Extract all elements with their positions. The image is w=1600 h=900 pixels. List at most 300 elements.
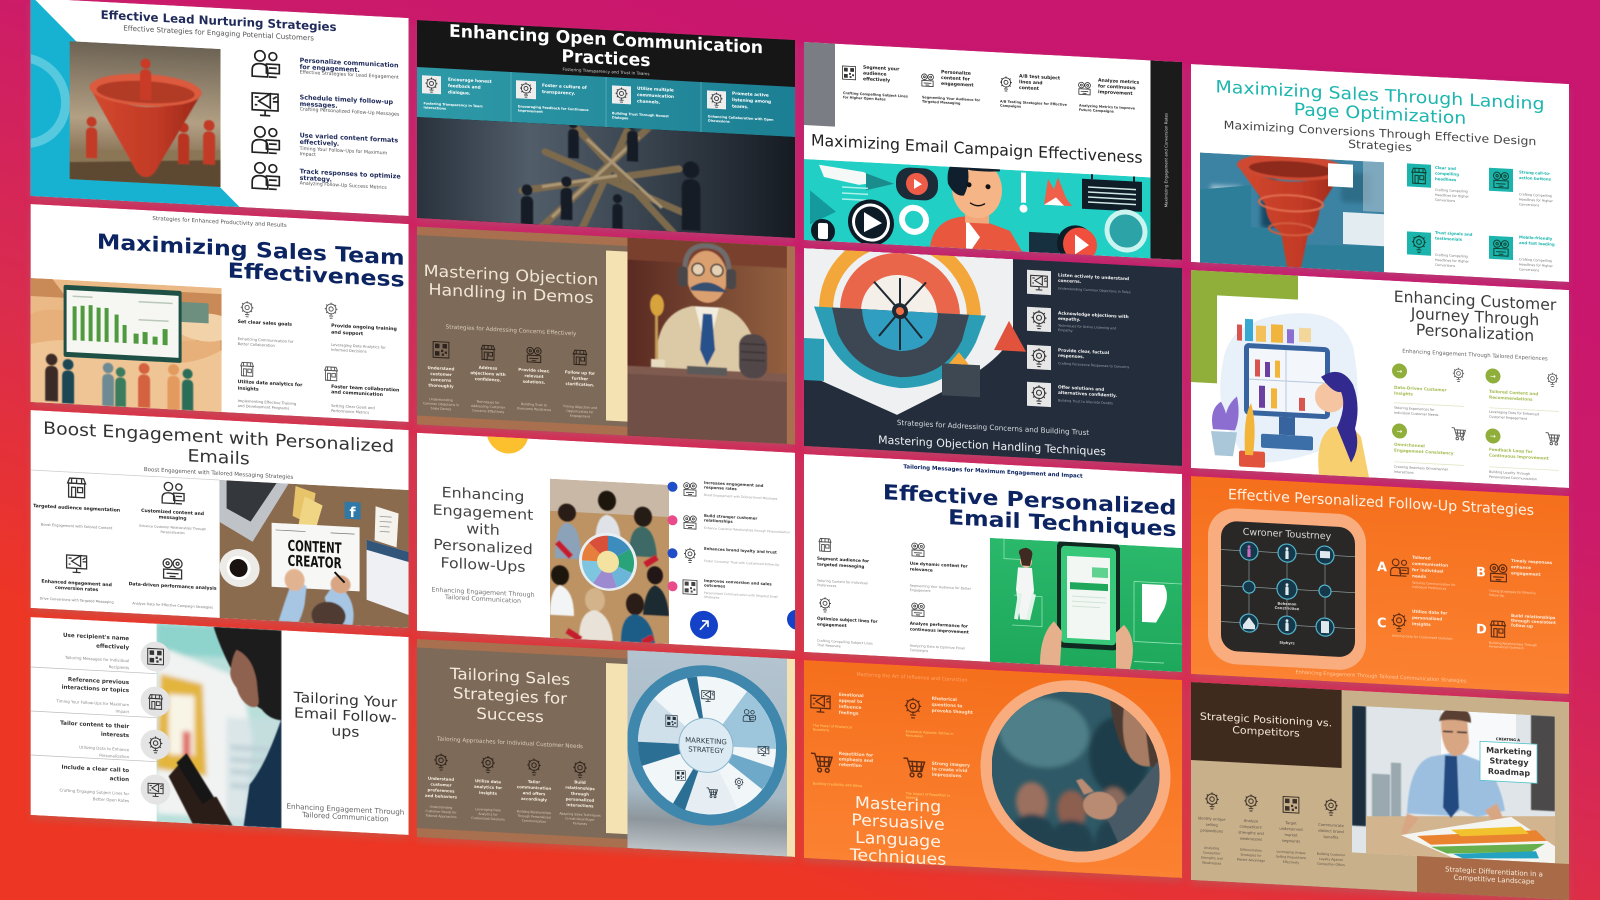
item: emotional appeal: The Power of Rhetorical [812, 723, 852, 730]
item: customized content: Enhance Customer Relationships Through [139, 524, 206, 531]
item: analyze metrics: for continuous [1098, 83, 1136, 91]
title: Emails [187, 446, 250, 469]
item D: Building Relationships Through [1489, 641, 1537, 647]
item: strong imagery: impressions [932, 772, 962, 779]
item: clear sales goals: Set clear sales goals [238, 319, 292, 328]
item: trust signals: testimonials [1435, 236, 1463, 242]
slide: Tailoring Your Email Follow-ups [31, 617, 409, 835]
subtitle: Effective Strategies for Engaging Potential Customers [123, 23, 314, 43]
column: unique propositions [1198, 792, 1226, 866]
item: A/B test subject lines: lines and [1019, 79, 1043, 86]
column: analyze competitors [1237, 794, 1265, 863]
teal strategy band: Enhancing Collaboration with Open [708, 114, 774, 122]
steps row: accordingly [521, 796, 547, 802]
list item: recipient's name: Use recipient's name [63, 633, 129, 642]
item: omnichannel: Omnichannel [1394, 442, 1425, 448]
photo: executive with strategy roadmap: CREATING A [1496, 737, 1520, 742]
item: clear sales goals: Better Collaboration [238, 342, 275, 348]
right strip [787, 246, 795, 444]
grey corner block [804, 42, 835, 127]
title: Maximizing Sales Through Landing [1215, 77, 1545, 114]
item: customized content [139, 481, 206, 536]
bullet list: Build stronger customer [704, 513, 757, 521]
item: performance analysis: Data-driven performance analysis [129, 581, 217, 592]
item: mobile friendly: Conversions [1519, 267, 1539, 272]
bullet list: response rates [704, 484, 737, 491]
item: segment audience: audience [863, 70, 886, 78]
title: with [466, 520, 500, 539]
steps row: Techniques for [475, 400, 500, 405]
bullet list: outcomes [704, 582, 726, 589]
title: Strategies for [453, 684, 567, 708]
item: emotional appeal: appeal to [839, 698, 862, 705]
steps row: relationships [565, 785, 595, 791]
teal strategy band [417, 67, 795, 137]
item: customized content: Customized content and [141, 508, 204, 517]
list item: previous interactions [55, 676, 171, 717]
subtitle: Strategies for Addressing Concerns Effectively [446, 325, 577, 337]
item: analyze performance: Analyzing Data to Optimize Email [910, 644, 965, 651]
list item: previous interactions: Timing Your Follow-Ups for Maximum [55, 698, 129, 707]
item: feedback loop: Personalized Communication [1489, 475, 1537, 481]
item: track responses: Analyzing Follow-Up Success Metrics [300, 180, 387, 191]
steps row: Leveraging Data [475, 807, 501, 812]
subtitle: Mastering the Art of Influence and Conviction [856, 672, 968, 684]
title: Effective Lead Nurturing Strategies [101, 8, 337, 34]
item: performance analysis [129, 557, 217, 610]
steps row: Understanding [429, 397, 453, 402]
steps row: Timing Objection and [562, 404, 597, 410]
green L-shaped block [1191, 270, 1298, 388]
steps row: Address [479, 365, 498, 371]
item: enhanced engagement: Enhanced engagement and [41, 579, 112, 588]
steps row: through [571, 791, 589, 797]
column: distinct benefits [1317, 798, 1346, 867]
subtitle: Boost Engagement with Tailored Messaging Strategies [144, 467, 293, 481]
item: analyze metrics [1079, 77, 1140, 115]
item: omnichannel: Creating Seamless Omnichannel [1394, 465, 1448, 472]
item: ongoing training: Leveraging Data Analytics for [331, 343, 386, 350]
item: track responses: Track responses to optimize [300, 167, 401, 181]
item: personalize content: Personalize [941, 69, 971, 77]
item: repetition: retention [839, 762, 862, 769]
steps row: Personas [573, 821, 587, 826]
item: team collaboration: Performance Metrics [331, 409, 369, 415]
column: distinct benefits: Building Customer [1317, 852, 1346, 857]
steps row: communication [517, 784, 551, 791]
item C [1377, 607, 1453, 641]
item: personalize content: content for [941, 75, 971, 83]
orange strips [417, 639, 795, 857]
title: Engagement [433, 501, 533, 524]
item: clear headlines: compelling [1435, 171, 1459, 177]
item: emotional appeal: Emotional [839, 692, 864, 699]
teal strategy band: listening among [732, 97, 771, 105]
photo: content creator desk: CONTENT [288, 537, 342, 557]
item: data-driven insights: → [1397, 367, 1403, 376]
item: personalize content [922, 68, 981, 107]
item A: A [1377, 560, 1387, 575]
second arrow button [787, 609, 807, 630]
steps row: Tailor [528, 779, 540, 785]
item C: Utilize data for [1412, 609, 1448, 616]
arrow button [690, 610, 718, 640]
column: analyze competitors: Analyze [1244, 819, 1259, 824]
cyan corner shape [31, 0, 240, 207]
item D: D [1476, 622, 1487, 638]
item D: through consistent [1511, 618, 1556, 625]
title: Tailoring Sales [449, 664, 570, 689]
teal strategy band: dialogue. [448, 89, 471, 97]
item: feedback loop: Feedback Loop for [1489, 447, 1533, 454]
item: strong imagery: to create vivid [932, 766, 967, 774]
subtitle: Strategies for Enhanced Productivity and Results [152, 216, 287, 229]
teal strategy band: Interactions [424, 106, 446, 111]
icon: monitor and megaphone [252, 93, 278, 116]
column: target segments: Effectively [1283, 860, 1299, 865]
bullet list: Enhances brand loyalty and trust [704, 546, 777, 555]
item: segment audience: Tailoring Content for Individual [816, 579, 868, 585]
title: Enhancing Open Communication [449, 22, 763, 58]
item: personalize communication: Effective Strategies for Lead Engagement [300, 69, 399, 81]
item: varied content formats: effectively. [300, 138, 339, 148]
item: team collaboration [325, 367, 399, 417]
title: ups [331, 722, 360, 741]
title: Language [855, 827, 941, 851]
steps row: further [572, 375, 588, 381]
item: tailored content: Leveraging Data for Enhanced [1489, 410, 1539, 416]
item: varied content formats: Timing Your Follow-Ups for Maximum [299, 146, 388, 156]
list item: recipient's name: Recipients [109, 664, 129, 670]
teal strategy band: feedback and [448, 83, 481, 91]
item: clear headlines: headlines [1435, 176, 1457, 182]
list item: call to action [60, 765, 171, 805]
item: ongoing training: Provide ongoing training [331, 323, 397, 332]
subtitle: Tailored Communication [301, 810, 389, 824]
subtitle: Fostering Transparency and Trust in Teams [562, 67, 650, 76]
steps row: to Individual Buyer [565, 816, 595, 822]
photo: content creator desk: f [350, 505, 357, 521]
list item: listen actively: concerns. [1058, 278, 1082, 285]
item: analyze performance [910, 603, 969, 655]
subtitle: Enhancing Engagement Through [286, 802, 404, 817]
illustration: gauge dial [804, 248, 1026, 415]
item: tailored content: Customer Engagement [1489, 415, 1528, 421]
item: varied content formats: Impact [300, 151, 316, 158]
slide: Enhancing Customer Journey Through Personalization [1191, 270, 1569, 488]
list item: tailor content: Personalization [99, 753, 130, 759]
title: Effectiveness [228, 259, 405, 292]
title: Boost Engagement with Personalized [43, 419, 394, 457]
item: emotional appeal: feelings [839, 710, 859, 717]
list item: recipient's name: effectively [96, 643, 129, 651]
item: rhetorical questions: Emotional Appeals: Pathos in [906, 729, 954, 736]
steps row: Follow up for [565, 369, 595, 376]
item: data-driven insights: Data-Driven Customer [1394, 385, 1447, 393]
item A: communication [1412, 561, 1448, 568]
item: optimize subject lines: Optimize subject lines for [817, 616, 879, 624]
illustration: shopper at online store [1211, 313, 1369, 478]
title: Mastering [855, 792, 941, 816]
item C: Utilizing Data for Customized Outreach [1392, 634, 1453, 641]
teal strategy band: channels. [637, 98, 661, 106]
steps row: concerns [431, 377, 452, 383]
steps row: customer [430, 782, 452, 788]
item: analyze performance: Analyze performance for [910, 621, 969, 629]
item: mobile friendly: and fast loading [1519, 240, 1555, 247]
item: data-driven insights: Individual Customer Needs [1394, 411, 1439, 417]
item D: Personalized Outreach [1489, 644, 1524, 650]
list item: previous interactions: Impact [115, 708, 130, 714]
item: data analytics: Utilize data analytics for [238, 379, 303, 388]
title: Mastering Objection Handling Techniques [878, 433, 1106, 458]
item: feedback loop: → [1490, 432, 1496, 441]
customer journey board: Bohemon [1278, 602, 1297, 607]
slide: Effective Personalized Email Techniques [804, 454, 1182, 672]
steps row: Customized Solutions [471, 816, 505, 822]
list item: acknowledge objections: Empathy [1058, 328, 1073, 333]
customer journey board [1221, 521, 1355, 658]
item: analyze performance: Campaigns [910, 648, 928, 653]
illustration: team viewing dashboard [30, 278, 222, 412]
title: Personalization [1416, 321, 1534, 345]
subtitle: Enhancing Engagement Through Tailored Communication Strategies [1296, 670, 1467, 685]
bullet list: Foster Consumer Trust with Customized Follow-Up [704, 559, 779, 567]
item: analyze metrics: improvement [1098, 89, 1133, 97]
item: strong call-to-action: Strong call-to- [1519, 169, 1551, 176]
photo: red funnel on table [70, 41, 221, 187]
item: tailored content: Tailored Content and [1489, 389, 1538, 396]
item: segment audience: targeted messaging [817, 561, 864, 569]
light ring decoration [30, 54, 70, 148]
item: data analytics [238, 362, 303, 411]
list item: previous interactions: Reference previous [68, 677, 130, 686]
list item: call to action: Better Open Rates [93, 796, 129, 803]
steps row: Understand [428, 365, 455, 371]
customer journey board: Constriction [1275, 606, 1300, 611]
item: dynamic content [910, 543, 972, 595]
item: segment audience: Segment audience for [817, 556, 870, 563]
cream strip [606, 663, 628, 834]
column: unique propositions: Competitor [1203, 851, 1221, 856]
column: target segments: Target [1284, 821, 1297, 826]
item A: needs [1412, 573, 1427, 579]
item: audience segmentation [33, 476, 120, 531]
dark title block [1191, 682, 1342, 768]
slide: Strategic Positioning vs. Competitors [1191, 682, 1569, 900]
title: Success [476, 704, 544, 726]
orange strips [417, 226, 795, 444]
column: analyze competitors: Strategies for [1240, 853, 1262, 858]
item: emotional appeal: influence [839, 704, 862, 711]
column: distinct benefits: Communicate [1318, 823, 1345, 828]
subtitle: Maximizing Conversions Through Effective Design [1224, 118, 1536, 148]
title: Personalized [433, 536, 533, 558]
column: analyze competitors: Market Advantage [1237, 857, 1265, 863]
column: unique propositions: Identify unique [1198, 816, 1226, 822]
slide: Mastering Persuasive Language Techniques [804, 660, 1182, 881]
item: data analytics: Implementing Effective Training [238, 399, 296, 406]
item: audience segmentation: Boost Engagement with Tailored Content [41, 523, 113, 530]
item: tailored content: Recommendations [1489, 395, 1533, 402]
column: distinct benefits: Loyalty Against [1319, 857, 1344, 862]
item D: follow-up [1511, 623, 1533, 629]
teal strategy band: Encourage honest [448, 77, 492, 85]
item: feedback loop: Building Loyalty Through [1489, 470, 1530, 476]
item: customized content: messaging [159, 514, 187, 522]
steps row: thoroughly [428, 383, 454, 389]
list item: call to action: action [110, 776, 129, 783]
column: analyze competitors: Differentiation [1240, 848, 1262, 853]
steps row: personalized [566, 796, 595, 803]
steps row: and behaviors [425, 793, 458, 800]
title: Handling in Demos [428, 280, 594, 307]
column: unique propositions: Analyzing [1204, 846, 1219, 850]
item: dynamic content: Segmenting Your Audience for Better [910, 584, 972, 591]
item D: Build relationships [1511, 613, 1556, 620]
item: trust signals: Trust signals and [1435, 230, 1473, 237]
icon: person with headset [252, 50, 279, 78]
title: Email Techniques [948, 506, 1176, 542]
bullet list: Improves conversion and sales [704, 578, 772, 587]
bullet list: relationships [704, 517, 733, 524]
list item: recipient's name: Tailoring Messages for Individual [64, 655, 129, 663]
title: Strategic Positioning vs. [1200, 711, 1332, 729]
item: enhanced engagement [40, 553, 114, 604]
photo: executive with strategy roadmap: Roadmap [1488, 767, 1530, 778]
list item: call to action: Include a clear call to [61, 765, 129, 774]
item: rhetorical questions: provoke thought [932, 708, 973, 716]
illustration: marketing strategy wheel: MARKETING [685, 736, 727, 746]
item: segment audience: effectively [863, 76, 890, 84]
list item: factual responses: Provide clear, factual [1058, 347, 1110, 356]
column: distinct benefits: Competitor Offers [1317, 862, 1345, 867]
photo: man pointing in circular frame [980, 675, 1170, 867]
item: optimize subject lines: Crafting Compelling Subject Lines [817, 639, 873, 646]
item: trust signals [1407, 231, 1472, 267]
teal strategy band: Building Trust Through Honest [612, 111, 669, 118]
item: clear headlines: Headlines for Higher [1435, 193, 1469, 199]
slide: Mastering Objection Handling Techniques [804, 234, 1182, 466]
steps row: Understanding [430, 805, 452, 810]
steps row: and offers [523, 790, 546, 796]
item: clear headlines [1407, 163, 1469, 204]
steps row: Common Objections in [423, 401, 459, 407]
item C: personalized [1412, 615, 1442, 621]
item: A/B test subject lines: Campaigns [1000, 104, 1021, 109]
teal strategy band: Foster a culture of [542, 83, 587, 91]
steps row: Adapting Sales Techniques [559, 812, 601, 818]
item: A/B test subject lines [1000, 74, 1067, 108]
title: Tailoring Your [293, 689, 398, 711]
item: track responses: strategy. [300, 174, 332, 184]
item: segment audience: Crafting Compelling Subject Lines [843, 91, 908, 98]
item: optimize subject lines [816, 597, 879, 650]
caption block [1417, 856, 1569, 900]
item: enhanced engagement: conversion rates [55, 585, 98, 593]
item: strong imagery [903, 758, 970, 803]
teal strategy band: Discussions [708, 119, 730, 124]
item: omnichannel: Interactions [1394, 470, 1414, 475]
column: target segments: market [1284, 833, 1298, 838]
subtitle: Tailoring Messages for Maximum Engagement and Impact [903, 464, 1083, 480]
item: audience segmentation: Targeted audience segmentation [33, 503, 120, 514]
title: Techniques [849, 844, 946, 869]
item: customized content: Personalization [161, 530, 185, 535]
column: target segments: Selling Propositions [1276, 854, 1306, 860]
photo: red funnel on blue mosaic [1200, 152, 1384, 272]
column: target segments: Leveraging Unique [1276, 850, 1306, 855]
item: emotional appeal: Questions [813, 727, 830, 732]
item: omnichannel: Engagement Consistency [1394, 448, 1454, 456]
column: target segments: segments [1282, 839, 1300, 844]
item: segment audience: Preferences [817, 583, 837, 588]
item: ongoing training: Informed Decisions [331, 348, 367, 354]
item: rhetorical questions: Persuasion [906, 733, 923, 738]
item: A/B test subject lines: content [1019, 85, 1040, 92]
item: optimize subject lines: That Resonate [816, 643, 841, 648]
list item: factual responses: responses. [1058, 353, 1085, 360]
steps row: Building Relationships [517, 809, 551, 815]
teal strategy band: Fostering Transparency in Team [424, 101, 483, 109]
item B [1476, 556, 1553, 600]
column: target segments [1276, 796, 1306, 865]
title: Follow-Ups [440, 554, 526, 576]
list item: recipient's name [63, 633, 171, 672]
item: clear headlines: Clear and [1435, 165, 1456, 171]
list item: offer solutions [1027, 382, 1117, 411]
item: data-driven insights: Insights [1394, 391, 1413, 397]
teal strategy band: Utilize multiple [637, 86, 674, 94]
item A: for individual [1412, 567, 1444, 574]
item D [1476, 611, 1556, 652]
column: distinct benefits: distinct brand [1318, 829, 1344, 834]
teal strategy band: teams. [732, 103, 749, 110]
photo: group circle around wheel [550, 478, 669, 644]
item: strong call-to-action [1489, 168, 1553, 208]
column: unique propositions: selling [1206, 823, 1218, 827]
subtitle: Enhancing Engagement Through Tailored Experiences [1402, 349, 1548, 362]
item: analyze performance: continuous improvement [910, 626, 969, 635]
list item: call to action: Crafting Engaging Subject Lines for [60, 788, 129, 796]
steps row: Build [574, 779, 586, 785]
item: repetition [811, 749, 874, 789]
photo: content creator desk: CREATOR [288, 552, 342, 572]
bullet list [668, 478, 790, 603]
photo: executive with strategy roadmap [1352, 706, 1555, 864]
steps row [423, 341, 597, 419]
item: clear sales goals: Enhancing Communication for [238, 337, 294, 344]
item: repetition: Repetition for [839, 751, 874, 759]
item: performance analysis: Analyze Data for Effective Campaign Strategies [132, 601, 213, 610]
item B: Timing Strategies for Effective [1488, 589, 1536, 595]
steps row: confidence. [475, 376, 502, 383]
item: strong call-to-action: Headlines for Higher [1519, 197, 1553, 203]
item A: Tailored [1412, 555, 1431, 561]
list item: tailor content [60, 721, 171, 761]
steps row: solutions. [523, 379, 546, 385]
slide: Effective Lead Nurturing Strategies [0, 0, 409, 216]
column: analyze competitors: weaknesses [1240, 837, 1262, 842]
bullet list: Boost Engagement with Tailored Email Messages [704, 493, 778, 501]
slide: Effective Personalized Follow-Up Strategies [1191, 476, 1569, 694]
photo: content creator desk [220, 480, 408, 628]
item: data-driven insights: Tailoring Experiences for [1393, 406, 1435, 412]
item: schedule follow-up: Crafting Personalized Follow-Up Messages [300, 106, 400, 118]
item: clear sales goals [238, 301, 294, 349]
teal strategy band: transparency. [542, 89, 576, 97]
caption text: Competitive Landscape [1453, 874, 1535, 886]
